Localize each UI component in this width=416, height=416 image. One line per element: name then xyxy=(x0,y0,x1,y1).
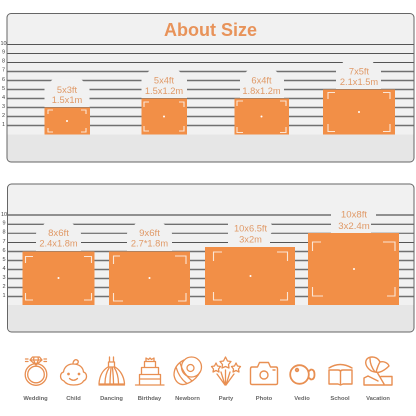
icon: birthday cake xyxy=(136,358,164,385)
axis numbers top: 8 xyxy=(2,58,5,64)
grid lines bottom xyxy=(8,215,414,296)
icon: party fireworks xyxy=(212,357,240,385)
label: Newborn: Newborn xyxy=(175,396,200,402)
size 6x4ft xyxy=(234,70,289,134)
icon row xyxy=(23,357,392,402)
axis numbers top: 3 xyxy=(2,104,5,110)
label: Photo: Photo xyxy=(256,396,273,402)
axis numbers top xyxy=(0,41,7,128)
size 5x3ft: 5x3ft xyxy=(57,85,77,95)
size 8x6ft: 2.4x1.8m xyxy=(39,238,78,248)
size 9x6ft xyxy=(109,223,190,305)
size 10x6.5ft: 3x2m xyxy=(239,234,262,244)
axis numbers top: 6 xyxy=(2,77,5,83)
icon: dancing dress xyxy=(99,357,124,385)
axis numbers bottom xyxy=(1,212,7,299)
axis numbers bottom: 8 xyxy=(2,230,6,236)
label: Child: Child xyxy=(66,396,81,402)
label: Wedding: Wedding xyxy=(23,396,48,402)
size 7x5ft: 7x5ft xyxy=(349,66,369,76)
size 5x4ft xyxy=(142,70,187,134)
panel: bottom sizes xyxy=(1,184,414,332)
label: Birthday: Birthday xyxy=(138,396,162,402)
panel: top sizes xyxy=(0,14,414,162)
axis numbers bottom: 5 xyxy=(2,257,6,263)
size 10x8ft: 3x2.4m xyxy=(338,221,370,232)
label: Dancing: Dancing xyxy=(100,396,123,402)
size 5x3ft: 1.5x1m xyxy=(52,95,82,105)
axis numbers bottom: 6 xyxy=(2,248,6,254)
axis numbers bottom: 2 xyxy=(2,284,6,290)
label: Party: Party xyxy=(219,396,234,402)
size 6x4ft: 1.8x1.2m xyxy=(242,86,281,96)
size 7x5ft: 2.1x1.5m xyxy=(340,77,378,87)
size 10x8ft xyxy=(308,210,399,305)
label: School: School xyxy=(330,396,350,402)
icon: video camera xyxy=(290,365,314,384)
axis numbers top: 2 xyxy=(2,113,5,119)
axis numbers bottom: 1 xyxy=(2,293,6,299)
size 6x4ft: 6x4ft xyxy=(251,76,272,86)
axis numbers top: 10 xyxy=(0,41,7,47)
axis numbers top: 9 xyxy=(2,50,5,56)
size 10x6.5ft xyxy=(205,220,295,305)
axis numbers bottom: 10 xyxy=(1,212,7,218)
size 10x6.5ft: 10x6.5ft xyxy=(234,224,267,234)
axis numbers bottom: 3 xyxy=(2,275,6,281)
icon: vacation beach xyxy=(364,357,392,385)
size 10x8ft: 10x8ft xyxy=(341,210,367,220)
axis numbers bottom: 7 xyxy=(2,239,6,245)
size 5x4ft: 1.5x1.2m xyxy=(145,86,183,96)
axis numbers bottom: 4 xyxy=(2,266,6,272)
icon: photo camera xyxy=(250,362,278,384)
axis numbers top: 1 xyxy=(2,122,5,128)
icon: newborn xyxy=(174,357,202,385)
size 9x6ft: 2.7*1.8m xyxy=(131,238,168,248)
axis numbers top: 5 xyxy=(2,86,5,92)
size 5x3ft xyxy=(44,79,90,134)
size 8x6ft xyxy=(22,223,94,305)
heading: About Size xyxy=(164,20,257,40)
size 7x5ft xyxy=(323,61,395,134)
grid lines top xyxy=(7,44,414,126)
label: Vacation: Vacation xyxy=(366,396,390,402)
size 9x6ft: 9x6ft xyxy=(139,228,160,239)
axis numbers top: 7 xyxy=(2,68,5,74)
axis numbers bottom: 9 xyxy=(2,220,6,226)
axis numbers top: 4 xyxy=(2,95,5,101)
size 8x6ft: 8x6ft xyxy=(48,228,69,239)
size 5x4ft: 5x4ft xyxy=(154,76,174,86)
icon: wedding xyxy=(25,357,47,385)
label: Vedio: Vedio xyxy=(294,396,310,402)
icon: child xyxy=(61,360,87,385)
icon: school book xyxy=(329,364,352,385)
